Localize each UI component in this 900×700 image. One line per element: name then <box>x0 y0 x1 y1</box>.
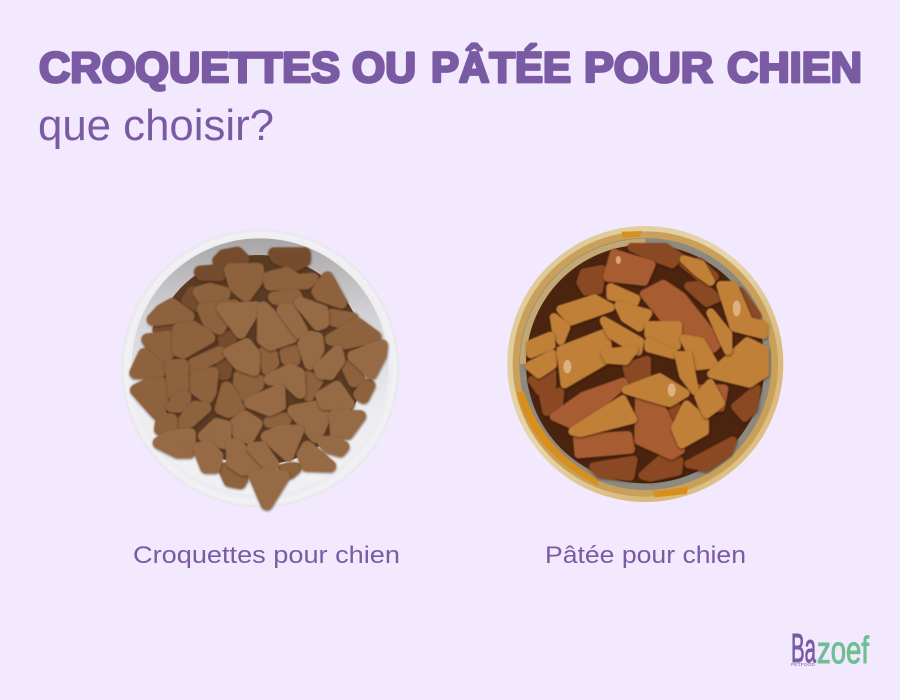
can rim <box>507 226 783 502</box>
title: CHIEN <box>727 44 862 92</box>
logo: Bazoef <box>791 625 869 672</box>
title <box>39 43 862 92</box>
bowl <box>121 229 399 507</box>
logo: Bazoef: zoef <box>817 630 869 672</box>
glaze highlights <box>563 256 741 397</box>
kibble pieces <box>135 253 382 504</box>
photo: bowl of kibble <box>121 229 399 507</box>
label: pâtée: Pâtée pour chien <box>545 542 746 569</box>
title: PÂTÉE <box>431 43 571 92</box>
photo: open can of pâtée <box>507 226 783 502</box>
subtitle: que choisir? <box>38 101 274 150</box>
title: CROQUETTES <box>39 44 340 92</box>
meat chunks <box>529 247 765 477</box>
label: croquettes: Croquettes pour chien <box>133 542 400 569</box>
title: POUR <box>584 44 713 92</box>
title: OU <box>352 44 416 92</box>
logo: Bazoef: Ba <box>791 625 816 671</box>
logo: Bazoef: PETFOOD <box>791 662 816 667</box>
